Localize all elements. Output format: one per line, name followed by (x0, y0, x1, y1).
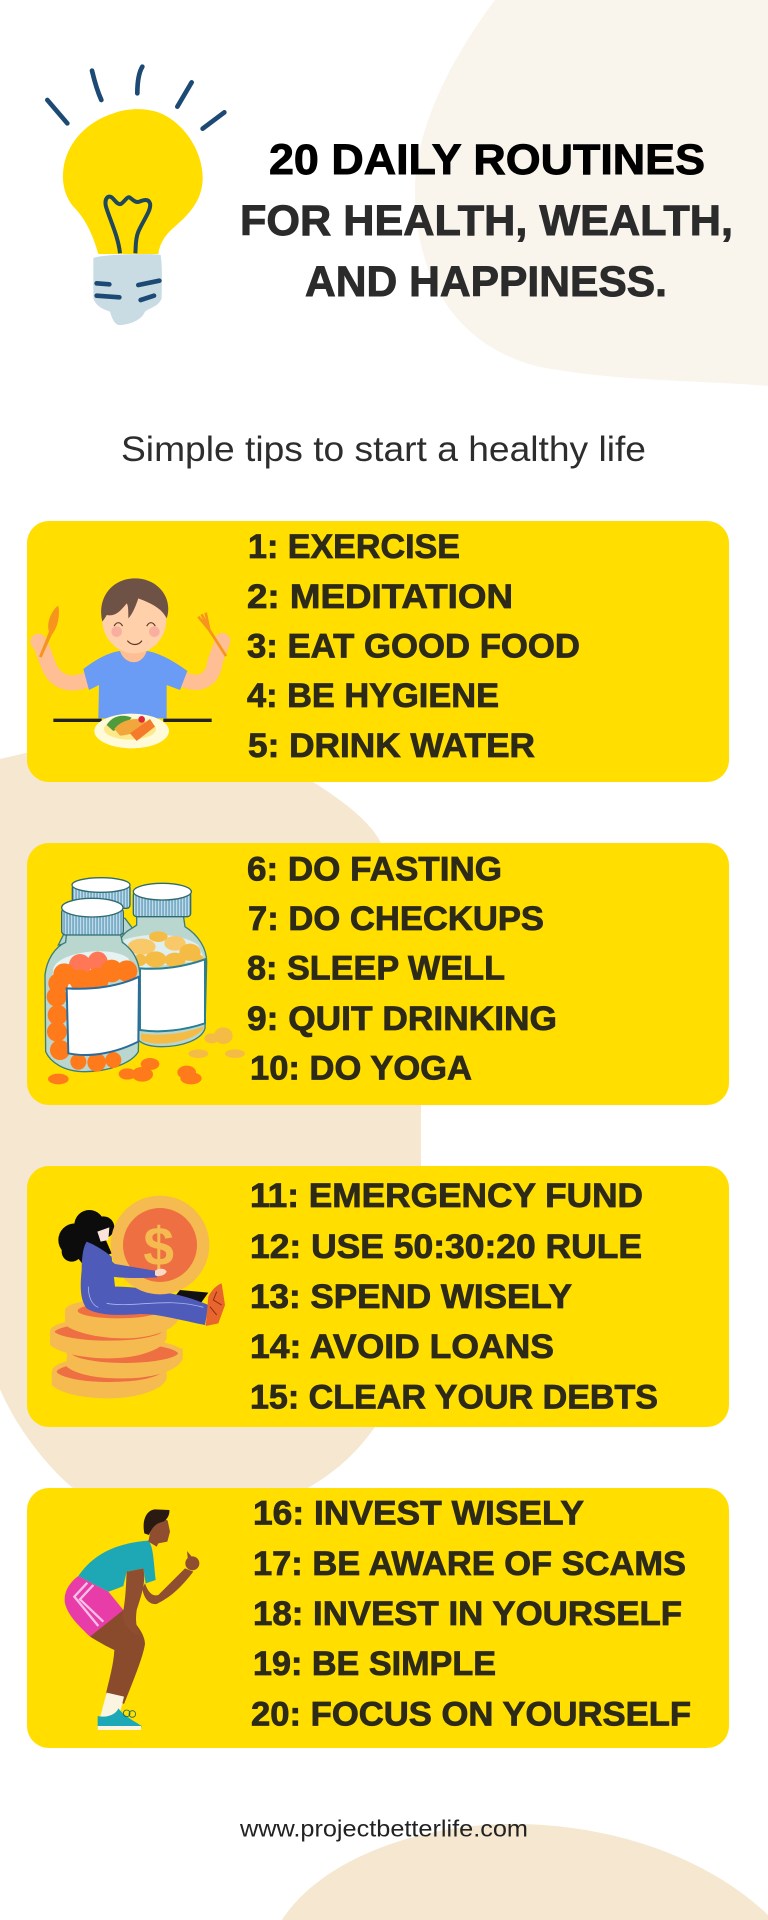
title line 2: FOR HEALTH, WEALTH, (240, 197, 733, 245)
footer website: www.projectbetterlife.com (239, 1816, 528, 1842)
routine list 16-20 (251, 1494, 691, 1734)
title line 1: 20 DAILY ROUTINES (269, 136, 705, 184)
icon: boy eating (30, 578, 230, 748)
routine list 11-15: 12: USE 50:30:20 RULE (250, 1228, 642, 1266)
routine list 16-20: 18: INVEST IN YOURSELF (253, 1595, 682, 1633)
routine list 6-10: 9: QUIT DRINKING (247, 1000, 557, 1038)
background blob: top right (415, 0, 768, 386)
panel: routines 1-5 (27, 521, 729, 782)
routine list 1-5 (247, 528, 580, 765)
routine list 1-5: 1: EXERCISE (248, 528, 460, 566)
icon: man giving thumbs up (65, 1509, 199, 1730)
routine list 1-5: 4: BE HYGIENE (247, 677, 499, 715)
icon: woman hugging a coin on a stack: $ (143, 1215, 174, 1277)
routine list 16-20: 19: BE SIMPLE (253, 1645, 496, 1683)
routine list 1-5: 5: DRINK WATER (248, 727, 535, 765)
icon: woman hugging a coin on a stack (50, 1196, 225, 1398)
routine list 6-10 (247, 850, 557, 1088)
routine list 16-20: 16: INVEST WISELY (253, 1494, 584, 1532)
routine list 16-20: 20: FOCUS ON YOURSELF (251, 1696, 691, 1734)
subtitle: Simple tips to start a healthy life (121, 430, 646, 469)
routine list 11-15: 15: CLEAR YOUR DEBTS (250, 1378, 658, 1416)
routine list 11-15: 14: AVOID LOANS (250, 1328, 554, 1366)
routine list 6-10: 6: DO FASTING (247, 850, 502, 888)
routine list 6-10: 10: DO YOGA (250, 1050, 472, 1088)
routine list 1-5: 2: MEDITATION (247, 578, 513, 616)
routine list 6-10: 8: SLEEP WELL (247, 950, 505, 988)
panel: routines 6-10 (27, 843, 729, 1105)
routine list 11-15 (250, 1177, 658, 1416)
background blob: left (0, 746, 421, 1506)
routine list 16-20: 17: BE AWARE OF SCAMS (253, 1545, 686, 1583)
background blob: bottom (282, 1824, 768, 1920)
routine list 11-15: 13: SPEND WISELY (250, 1278, 572, 1316)
title line 3: AND HAPPINESS. (305, 258, 667, 306)
title (240, 136, 733, 306)
routine list 11-15: 11: EMERGENCY FUND (250, 1177, 643, 1215)
panel: routines 16-20 (27, 1488, 729, 1748)
icon: light bulb (47, 67, 224, 325)
routine list 6-10: 7: DO CHECKUPS (248, 900, 544, 938)
routine list 1-5: 3: EAT GOOD FOOD (247, 628, 580, 666)
icon: supplement bottles (45, 878, 245, 1084)
panel: routines 11-15 (27, 1166, 729, 1427)
